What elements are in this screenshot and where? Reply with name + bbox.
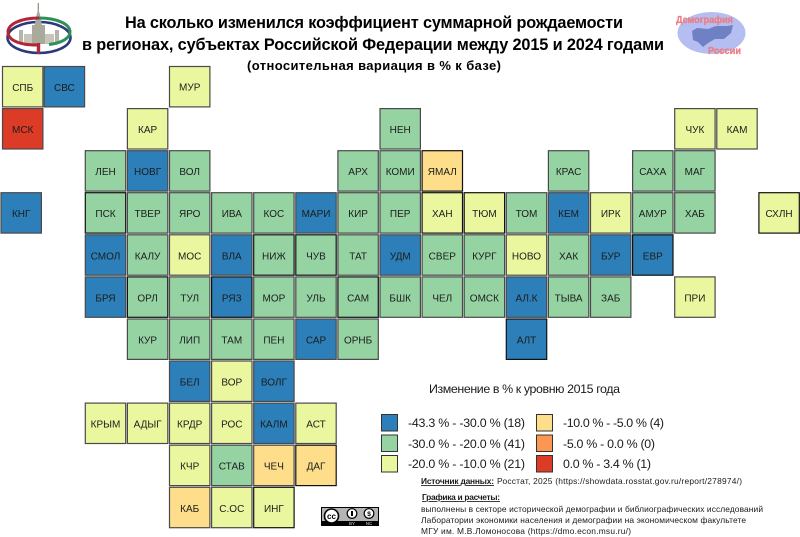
region СТАВ: СТАВ [219, 462, 245, 473]
credits note [421, 492, 763, 536]
region ТВЕР: ТВЕР [135, 209, 161, 220]
region СВЕР: СВЕР [429, 251, 456, 262]
region ЛИП [170, 319, 210, 359]
region КОМИ [380, 151, 420, 191]
region ЧУК [675, 109, 715, 149]
region МУР: МУР [179, 82, 201, 94]
region АМУР [633, 193, 673, 233]
region АДЫГ [127, 403, 168, 444]
region СВС [44, 66, 85, 107]
icon: creative commons BY-NC badge [321, 507, 379, 526]
region БШК: БШК [389, 293, 411, 304]
region МУР [170, 66, 210, 107]
region САХА: САХА [639, 167, 667, 178]
region КОС [254, 193, 294, 233]
region КРЫМ [85, 403, 126, 444]
region ОМСК: ОМСК [470, 293, 499, 304]
region ТОМ: ТОМ [516, 209, 537, 220]
region ТЮМ: ТЮМ [472, 209, 497, 220]
region ВОЛ: ВОЛ [179, 167, 200, 178]
region ЛИП: ЛИП [179, 336, 200, 346]
legend item: -5.0 to 0.0: -5.0 % - 0.0 % (0) [563, 437, 655, 451]
region ЯРО: ЯРО [179, 209, 201, 220]
region БРЯ [85, 277, 126, 317]
region ЛЕН: ЛЕН [95, 167, 116, 178]
region ОМСК [464, 277, 505, 317]
region ПЕН [254, 319, 294, 359]
region ЯМАЛ: ЯМАЛ [428, 167, 457, 178]
region ВОЛГ [254, 361, 294, 401]
region КАМ: КАМ [727, 125, 747, 136]
region МОС [170, 235, 210, 275]
region ЗАБ [590, 277, 631, 317]
region ЧЕЛ [422, 277, 462, 317]
region ЧЕЧ [254, 445, 294, 486]
region ИВА: ИВА [222, 209, 242, 220]
region РЯЗ [212, 277, 252, 317]
region САР [296, 319, 336, 359]
region КАЛУ [127, 235, 168, 275]
region АЛТ: АЛТ [517, 336, 536, 346]
icon: creative commons BY-NC badge: cc [327, 512, 336, 521]
region ХАБ: ХАБ [685, 209, 705, 220]
region БЕЛ [170, 361, 210, 401]
region БУР: БУР [601, 251, 621, 262]
region КУРГ [464, 235, 505, 275]
region ИНГ: ИНГ [264, 504, 284, 515]
region МОР: МОР [263, 293, 286, 304]
region ТЮМ [464, 193, 505, 233]
region ПРИ [675, 277, 715, 317]
region ЧУВ [296, 235, 336, 275]
region КРАС: КРАС [556, 167, 581, 178]
region КАР [127, 109, 168, 149]
region КАЛМ [254, 403, 294, 444]
region КАЛМ: КАЛМ [260, 420, 288, 431]
region ЕВР: ЕВР [643, 251, 663, 262]
region КРЫМ: КРЫМ [91, 420, 120, 431]
region КАБ [170, 487, 210, 528]
region САХА [633, 151, 673, 191]
region ДАГ: ДАГ [307, 462, 326, 473]
region КРАС [548, 151, 589, 191]
region АЛТ [506, 319, 547, 359]
region САМ [338, 277, 378, 317]
region НОВГ [127, 151, 168, 191]
legend item: 0.0 to 3.4: 0.0 % - 3.4 % (1) [563, 457, 651, 471]
region ТАМ: ТАМ [221, 336, 242, 346]
region ВОЛГ: ВОЛГ [261, 378, 287, 388]
region ЧУК: ЧУК [685, 125, 704, 136]
data source note: Источник данных: [421, 476, 494, 486]
credits note: МГУ им. М.В.Ломоносова (https://dmo.econ.msu.ru/) [421, 526, 631, 536]
region АЛ.К: АЛ.К [515, 293, 538, 304]
logo: Demography of Russia [676, 12, 746, 57]
region ТАМ [212, 319, 252, 359]
region БЕЛ: БЕЛ [180, 378, 200, 388]
region КИР: КИР [348, 209, 368, 220]
region ХАН: ХАН [432, 209, 453, 220]
region КОС: КОС [264, 209, 284, 220]
region КОМИ: КОМИ [386, 167, 415, 178]
region ЯМАЛ [422, 151, 462, 191]
legend item: -43.3 to -30.0: -43.3 % - -30.0 % (18) [408, 416, 525, 430]
logo: Demography of Russia: России [708, 45, 741, 57]
region КАБ: КАБ [180, 504, 200, 515]
legend item: -20.0 to -10.0 [382, 456, 525, 472]
legend [382, 382, 664, 472]
region АСТ [296, 403, 336, 444]
legend item: -5.0 to 0.0 [536, 435, 655, 452]
region ВОЛ [170, 151, 210, 191]
region ТУЛ: ТУЛ [180, 293, 199, 304]
region ИРК [590, 193, 631, 233]
legend item: -10.0 to -5.0: -10.0 % - -5.0 % (4) [563, 416, 664, 430]
region АЛ.К [506, 277, 547, 317]
region БШК [380, 277, 420, 317]
region ХАБ [675, 193, 715, 233]
credits note: Графика и расчеты: [422, 492, 500, 502]
region НИЖ: НИЖ [262, 251, 286, 262]
region МАРИ [296, 193, 336, 233]
region НОВО: НОВО [512, 251, 541, 262]
legend item: 0.0 to 3.4 [536, 456, 651, 472]
region МАРИ: МАРИ [302, 209, 330, 220]
region СВЕР [422, 235, 462, 275]
region ХАК: ХАК [559, 251, 578, 262]
region НОВО [506, 235, 547, 275]
region МОС: МОС [178, 251, 201, 262]
region ТАТ: ТАТ [349, 251, 367, 262]
region ЯРО [170, 193, 210, 233]
legend item: -20.0 to -10.0: -20.0 % - -10.0 % (21) [408, 457, 525, 471]
region ПЕР: ПЕР [390, 209, 411, 220]
region НЕН: НЕН [390, 125, 411, 136]
region МСК: МСК [12, 125, 34, 136]
region МАГ: МАГ [685, 167, 706, 178]
region ИРК: ИРК [601, 209, 621, 220]
region АМУР: АМУР [639, 209, 667, 220]
region СХЛН [759, 193, 799, 233]
region АРХ [338, 151, 378, 191]
credits note: выполнены в секторе исторической демографии и библиографических исследований [421, 504, 763, 514]
region ВОР: ВОР [221, 378, 243, 388]
region КРДР [170, 403, 210, 444]
region ВЛА [212, 235, 252, 275]
region КНГ [1, 193, 41, 233]
region ЗАБ: ЗАБ [601, 293, 621, 304]
credits note: Лаборатории экономики населения и демографии на экономическом факультете [421, 515, 746, 525]
title: На сколько изменился коэффициент суммарной рождаемости [125, 14, 623, 32]
region ПСК: ПСК [95, 209, 116, 220]
legend item: -30.0 to -20.0: -30.0 % - -20.0 % (41) [408, 437, 525, 451]
region ОРЛ [127, 277, 168, 317]
icon: creative commons BY-NC badge: NC [366, 521, 373, 526]
region ХАН [422, 193, 462, 233]
region ТЫВА [548, 277, 589, 317]
region АДЫГ: АДЫГ [134, 420, 162, 431]
region ПСК [85, 193, 126, 233]
region КУР [127, 319, 168, 359]
region ПЕН: ПЕН [263, 336, 284, 346]
region КЕМ [548, 193, 589, 233]
legend title: Изменение в % к уровню 2015 года [429, 382, 620, 396]
region С.ОС [212, 487, 252, 528]
region УЛЬ [296, 277, 336, 317]
region СТАВ [212, 445, 252, 486]
title: в регионах, субъектах Российской Федерации между 2015 и 2024 годами [82, 36, 664, 54]
region ТАТ [338, 235, 378, 275]
icon: creative commons BY-NC badge: $ [367, 511, 371, 518]
region ЕВР [633, 235, 673, 275]
icon: creative commons BY-NC badge: BY [349, 521, 355, 526]
region АРХ: АРХ [348, 167, 368, 178]
region ТЫВА: ТЫВА [555, 293, 583, 304]
region АСТ: АСТ [306, 420, 326, 431]
region ВЛА: ВЛА [222, 251, 242, 262]
title [82, 14, 664, 73]
region МОР [254, 277, 294, 317]
title: (относительная вариация в % к базе) [247, 58, 501, 73]
region КУР: КУР [138, 336, 157, 346]
region ЧЕЧ: ЧЕЧ [264, 462, 284, 473]
region КИР [338, 193, 378, 233]
region РОС [212, 403, 252, 444]
region ЧУВ: ЧУВ [306, 251, 326, 262]
logo: university building with rings [8, 3, 70, 54]
region НЕН [380, 109, 420, 149]
region СПБ: СПБ [12, 83, 34, 94]
region САМ: САМ [347, 293, 369, 304]
logo: Demography of Russia: Демография [676, 14, 733, 26]
region КРДР: КРДР [177, 420, 203, 431]
region УЛЬ: УЛЬ [306, 293, 326, 304]
region ОРНБ: ОРНБ [344, 336, 373, 346]
region ОРЛ: ОРЛ [137, 293, 158, 304]
region СХЛН: СХЛН [766, 209, 793, 220]
region УДМ: УДМ [390, 251, 411, 262]
region БРЯ: БРЯ [95, 293, 116, 304]
region ВОР [212, 361, 252, 401]
region РЯЗ: РЯЗ [222, 293, 242, 304]
region КАМ [717, 109, 757, 149]
region КНГ: КНГ [12, 209, 31, 220]
region КЧР: КЧР [180, 462, 200, 473]
region КЧР [170, 445, 210, 486]
region КАР: КАР [138, 125, 158, 136]
region ТУЛ [170, 277, 210, 317]
region С.ОС: С.ОС [219, 504, 244, 515]
region ПРИ: ПРИ [684, 293, 705, 304]
legend item: -43.3 to -30.0 [382, 414, 525, 431]
region ХАК [548, 235, 589, 275]
region ИВА [212, 193, 252, 233]
region БУР [590, 235, 631, 275]
region СВС: СВС [54, 83, 75, 94]
legend item: -10.0 to -5.0 [536, 414, 664, 431]
region КУРГ: КУРГ [472, 251, 497, 262]
region СПБ [2, 66, 43, 107]
region САР: САР [306, 336, 326, 346]
region НОВГ: НОВГ [134, 167, 162, 178]
region СМОЛ [85, 235, 126, 275]
region ИНГ [254, 487, 294, 528]
region КАЛУ: КАЛУ [135, 251, 161, 262]
region ПЕР [380, 193, 420, 233]
region УДМ [380, 235, 420, 275]
region ДАГ [296, 445, 336, 486]
region ОРНБ [338, 319, 378, 359]
data source note: Росстат, 2025 (https://showdata.rosstat.gov.ru/report/278974/) [497, 476, 742, 486]
region КЕМ: КЕМ [558, 209, 579, 220]
region ТОМ [506, 193, 547, 233]
legend item: -30.0 to -20.0 [382, 435, 525, 452]
region МСК [2, 109, 43, 149]
region ТВЕР [127, 193, 168, 233]
region ЧЕЛ: ЧЕЛ [432, 293, 452, 304]
region ЛЕН [85, 151, 126, 191]
region СМОЛ: СМОЛ [91, 251, 120, 262]
region РОС: РОС [221, 420, 243, 431]
region МАГ [675, 151, 715, 191]
region НИЖ [254, 235, 294, 275]
